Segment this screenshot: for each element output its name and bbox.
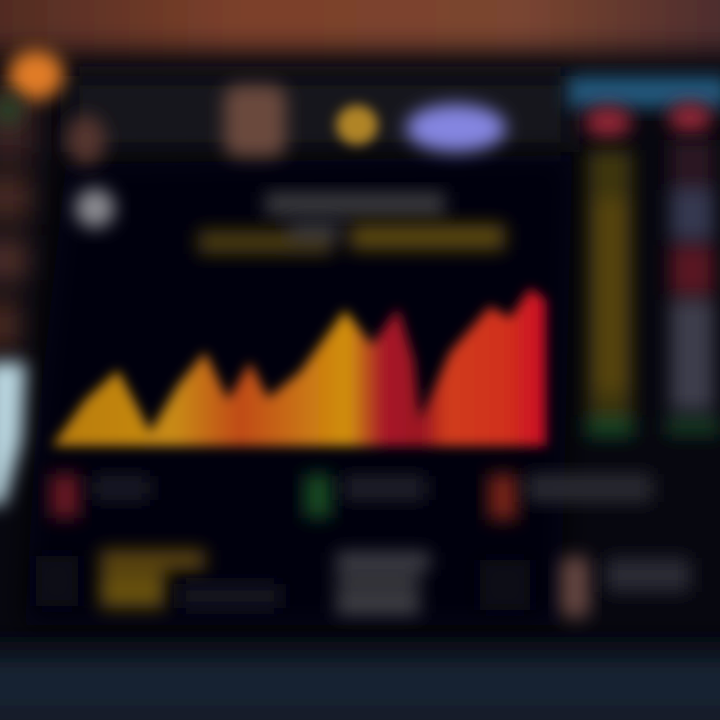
icon: tan object bbox=[66, 115, 106, 165]
right column: level meter bbox=[586, 150, 634, 437]
bottom floor band bbox=[0, 645, 720, 720]
stat block: pink bbox=[480, 556, 690, 618]
stat caption: pink bbox=[606, 558, 690, 592]
upper shelf band bbox=[70, 76, 570, 152]
stat value: yellow bbox=[100, 550, 205, 608]
stat icon: pink bbox=[560, 556, 590, 618]
legend: orange item bbox=[488, 474, 652, 520]
tan shape in shelf bbox=[224, 85, 286, 157]
icon: pale blue glow bbox=[0, 362, 26, 505]
icon: red markers bbox=[584, 102, 712, 138]
legend: red item bbox=[50, 474, 150, 518]
stat caption: yellow bbox=[180, 584, 280, 608]
legend label: red bbox=[92, 476, 150, 500]
right column: mixed meter bbox=[666, 140, 720, 435]
stat block: white bbox=[336, 552, 430, 614]
legend swatch: orange bbox=[488, 474, 518, 520]
stat block: yellow bbox=[36, 550, 280, 608]
top wall band bbox=[0, 0, 720, 52]
icon: pale badge bbox=[75, 188, 115, 228]
top right blue header bbox=[568, 76, 720, 108]
icon: green spot left bbox=[0, 94, 22, 126]
icon: orange lamp bbox=[8, 50, 64, 100]
legend label: green bbox=[342, 476, 426, 500]
legend swatch: red bbox=[50, 474, 80, 518]
stat icon: yellow bbox=[36, 556, 78, 606]
area chart bbox=[52, 288, 546, 446]
title bbox=[265, 192, 445, 216]
legend: green item bbox=[304, 474, 426, 518]
legend label: orange bbox=[526, 474, 652, 502]
legend swatch: green bbox=[304, 474, 332, 518]
icon: lavender oval bbox=[406, 104, 506, 152]
dark display panel bbox=[25, 155, 572, 625]
stat icon: dark bbox=[480, 560, 530, 610]
subtitle bbox=[198, 220, 505, 254]
icon: yellow dot bbox=[336, 105, 378, 145]
left wall strip bbox=[0, 90, 36, 350]
